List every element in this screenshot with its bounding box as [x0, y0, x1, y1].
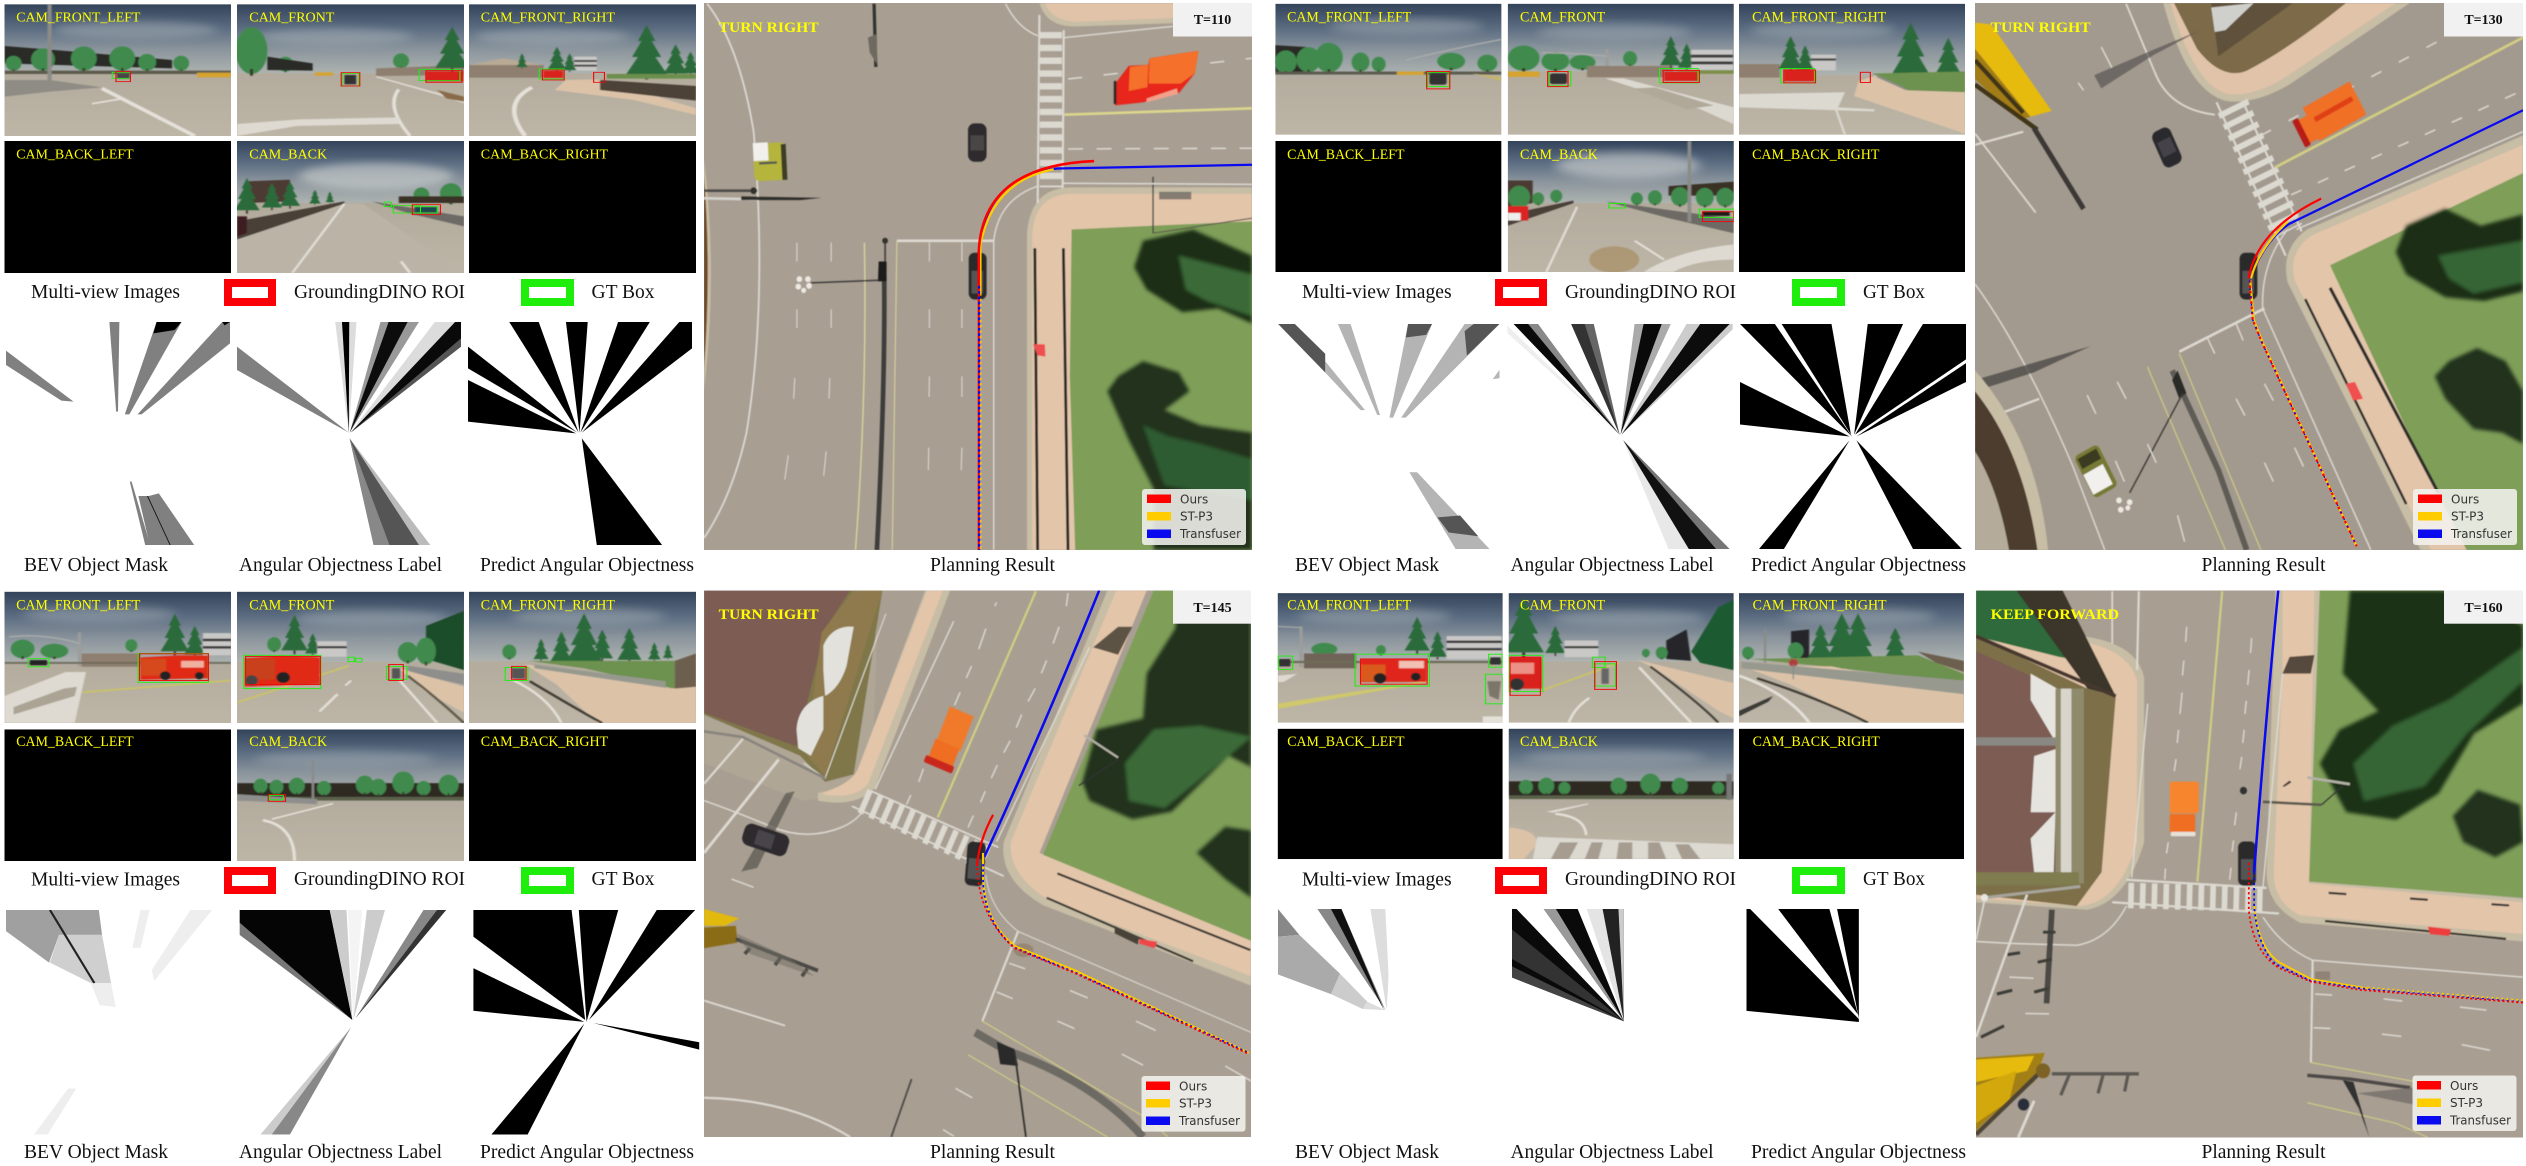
legend swatch: GT Box	[525, 283, 570, 302]
GT box	[419, 69, 460, 81]
ROI box	[426, 71, 462, 82]
caption: Predict Angular Objectness: Predict Angular Objectness	[1751, 1141, 1966, 1163]
legend swatch: GT Box	[1796, 283, 1841, 302]
mask: BEV object mask	[1278, 324, 1500, 549]
GT box	[1592, 657, 1605, 668]
legend swatch: GroundingDINO ROI	[228, 283, 272, 302]
camera: CAM_BACK_RIGHT	[1739, 141, 1965, 272]
time stamp: T=160	[2464, 601, 2503, 616]
ROI box	[1548, 72, 1568, 87]
caption: Angular Objectness Label: Angular Objectness Label	[1510, 1141, 1714, 1163]
caption: GT Box: GT Box	[592, 281, 654, 303]
GT box	[1278, 656, 1293, 669]
GT box	[348, 657, 354, 662]
camera label: CAM_BACK_LEFT	[1287, 733, 1404, 750]
driving command: TURN RIGHT	[1991, 20, 2091, 36]
caption: Planning Result: Planning Result	[930, 554, 1055, 576]
legend swatch: GroundingDINO ROI	[1499, 871, 1543, 890]
legend swatch: GT Box	[1796, 871, 1841, 890]
caption: Multi-view Images: Multi-view Images	[1302, 281, 1452, 303]
camera label: CAM_BACK_RIGHT	[1752, 146, 1879, 163]
caption: Predict Angular Objectness: Predict Angular Objectness	[480, 1141, 694, 1163]
GT box	[356, 658, 362, 662]
caption: GT Box: GT Box	[1863, 281, 1925, 303]
ROI box	[1703, 212, 1734, 222]
camera label: CAM_BACK	[249, 733, 327, 750]
GT box	[270, 795, 283, 800]
map scene T=145	[704, 590, 1251, 1137]
panel: planning result T=130	[1975, 0, 2523, 576]
GT box	[539, 69, 564, 79]
ROI box	[1595, 662, 1616, 689]
trajectory legend: Transfuser	[2450, 527, 2512, 541]
trajectory legend: Ours	[2451, 492, 2479, 506]
ROI box	[116, 72, 130, 82]
caption: Angular Objectness Label: Angular Objectness Label	[239, 554, 442, 576]
ROI box	[139, 654, 208, 680]
GT box	[505, 668, 528, 680]
caption: Planning Result: Planning Result	[2202, 554, 2326, 576]
GT box	[112, 72, 130, 78]
camera label: CAM_BACK	[1520, 733, 1598, 750]
GT box	[1609, 203, 1625, 208]
mask: BEV object mask	[6, 910, 212, 1134]
camera label: CAM_FRONT	[1520, 9, 1605, 25]
camera: CAM_FRONT_LEFT	[1275, 4, 1502, 135]
camera: CAM_BACK_RIGHT	[1739, 728, 1964, 860]
GT box	[1660, 69, 1698, 83]
panel: planning result T=145	[704, 590, 1251, 1163]
camera label: CAM_FRONT	[249, 596, 334, 613]
time stamp: T=130	[2464, 13, 2503, 28]
caption: Multi-view Images: Multi-view Images	[1302, 869, 1452, 891]
camera: CAM_BACK_LEFT	[4, 729, 231, 861]
caption: GroundingDINO ROI: GroundingDINO ROI	[294, 868, 465, 890]
camera: CAM_BACK	[1508, 141, 1734, 272]
trajectory legend	[2413, 489, 2517, 545]
driving command: TURN RIGHT	[719, 20, 819, 36]
camera: CAM_BACK_RIGHT	[469, 141, 696, 273]
camera label: CAM_BACK_LEFT	[16, 146, 134, 162]
camera: CAM_FRONT_LEFT	[1278, 593, 1503, 723]
ROI box	[1361, 659, 1427, 684]
camera label: CAM_FRONT_RIGHT	[1752, 9, 1886, 25]
caption: GT Box: GT Box	[1863, 868, 1925, 890]
GT box	[1549, 72, 1571, 86]
driving command: TURN RIGHT	[719, 607, 819, 623]
time stamp	[2444, 590, 2523, 624]
GT box	[342, 73, 359, 86]
ROI box	[512, 666, 526, 679]
caption: BEV Object Mask: BEV Object Mask	[1295, 554, 1439, 576]
camera label: CAM_BACK_RIGHT	[481, 146, 608, 162]
camera label: CAM_FRONT_RIGHT	[1753, 596, 1887, 613]
camera: CAM_BACK	[1508, 728, 1734, 860]
caption: BEV Object Mask: BEV Object Mask	[24, 1141, 168, 1163]
GT box	[244, 655, 321, 689]
camera: CAM_FRONT	[1508, 593, 1734, 723]
map scene T=110	[704, 3, 1252, 550]
ROI box	[1510, 657, 1540, 695]
camera label: CAM_BACK_LEFT	[1287, 146, 1405, 163]
camera label: CAM_BACK	[249, 146, 327, 162]
camera label: CAM_FRONT_RIGHT	[481, 9, 615, 25]
camera label: CAM_BACK_RIGHT	[1753, 733, 1880, 750]
GT box	[1489, 654, 1502, 667]
camera label: CAM_BACK_RIGHT	[481, 733, 608, 750]
panel: planning result T=160	[1976, 590, 2523, 1163]
caption: GroundingDINO ROI: GroundingDINO ROI	[1565, 281, 1736, 303]
trajectory lines	[2248, 110, 2523, 546]
ROI box	[1427, 72, 1450, 89]
caption: Angular Objectness Label: Angular Objectness Label	[239, 1141, 442, 1163]
camera: CAM_BACK_LEFT	[4, 141, 231, 273]
mask: BEV object mask	[1278, 909, 1388, 1010]
trajectory lines	[979, 161, 1252, 550]
GT box	[1781, 69, 1815, 83]
panel: T=110 sensor views and masks	[4, 4, 699, 576]
mask: angular objectness label	[1512, 909, 1624, 1022]
camera: CAM_BACK_RIGHT	[469, 729, 696, 861]
ROI box	[542, 70, 564, 80]
mask: angular objectness label	[1508, 324, 1733, 549]
panel: T=145 sensor views and masks	[4, 592, 699, 1163]
caption: GroundingDINO ROI: GroundingDINO ROI	[1565, 868, 1736, 890]
mask: predicted angular objectness	[1740, 324, 1966, 549]
camera: CAM_FRONT_RIGHT	[1739, 593, 1964, 723]
camera: CAM_FRONT	[237, 4, 464, 136]
trajectory lines	[2249, 590, 2523, 1003]
time stamp	[1173, 3, 1252, 36]
time stamp: T=110	[1194, 13, 1231, 28]
panel: T=130 sensor views and masks	[1274, 4, 1966, 576]
trajectory legend	[1142, 489, 1246, 545]
ROI box	[246, 656, 320, 685]
GT box	[1509, 655, 1543, 692]
trajectory legend: Ours	[1179, 1080, 1207, 1094]
legend swatch: GT Box	[525, 871, 570, 890]
caption: Predict Angular Objectness: Predict Angular Objectness	[1751, 554, 1966, 576]
GT box	[393, 206, 421, 213]
time stamp	[2444, 3, 2523, 36]
mask: predicted angular objectness	[473, 910, 700, 1134]
ROI box	[1860, 72, 1870, 82]
GT box	[138, 653, 208, 682]
caption: Multi-view Images: Multi-view Images	[31, 281, 180, 303]
camera: CAM_FRONT_LEFT	[4, 4, 231, 136]
ROI box	[412, 205, 440, 215]
GT box	[387, 666, 407, 679]
ROI box	[1663, 70, 1699, 82]
camera: CAM_BACK_LEFT	[1278, 728, 1503, 860]
trajectory legend: Ours	[1180, 492, 1208, 506]
trajectory lines	[977, 590, 1249, 1054]
camera label: CAM_FRONT_RIGHT	[481, 596, 615, 613]
camera: CAM_BACK	[237, 729, 464, 861]
camera: CAM_FRONT	[237, 592, 464, 723]
trajectory legend: ST-P3	[2450, 1096, 2483, 1110]
mask: predicted angular objectness	[1746, 909, 1859, 1022]
camera: CAM_BACK	[237, 141, 464, 273]
GT box	[28, 659, 49, 667]
ROI box	[389, 665, 403, 680]
panel: T=160 sensor views and masks	[1278, 593, 1973, 1163]
camera label: CAM_BACK_LEFT	[16, 733, 134, 750]
camera: CAM_FRONT_RIGHT	[469, 592, 696, 723]
camera: CAM_FRONT_RIGHT	[469, 4, 696, 136]
time stamp	[1173, 590, 1251, 624]
camera label: CAM_FRONT_LEFT	[16, 9, 140, 25]
trajectory legend: Transfuser	[1178, 1114, 1240, 1128]
GT box	[412, 206, 437, 213]
caption: BEV Object Mask: BEV Object Mask	[1295, 1141, 1439, 1163]
trajectory legend	[2412, 1076, 2516, 1131]
caption: Predict Angular Objectness: Predict Angular Objectness	[480, 554, 694, 576]
caption: GroundingDINO ROI: GroundingDINO ROI	[294, 281, 465, 303]
GT box	[1595, 664, 1616, 686]
GT box	[1428, 72, 1449, 87]
camera label: CAM_FRONT_LEFT	[1287, 9, 1411, 25]
caption: Angular Objectness Label: Angular Objectness Label	[1510, 554, 1714, 576]
ROI box	[1784, 70, 1816, 83]
camera label: CAM_FRONT_LEFT	[16, 596, 140, 613]
trajectory legend: Ours	[2450, 1079, 2478, 1093]
legend swatch: GroundingDINO ROI	[1499, 283, 1543, 302]
camera: CAM_FRONT_LEFT	[4, 592, 231, 723]
mask: angular objectness label	[240, 910, 446, 1134]
camera label: CAM_BACK	[1520, 146, 1598, 163]
caption: Multi-view Images: Multi-view Images	[31, 869, 180, 891]
camera: CAM_FRONT_RIGHT	[1739, 4, 1965, 135]
trajectory legend: ST-P3	[2451, 510, 2484, 524]
caption: BEV Object Mask: BEV Object Mask	[24, 554, 168, 576]
GT box	[1355, 654, 1429, 686]
ROI box	[268, 795, 285, 801]
caption: Planning Result: Planning Result	[930, 1141, 1055, 1163]
caption: GT Box: GT Box	[592, 868, 654, 890]
mask: BEV object mask	[6, 322, 230, 545]
legend swatch: GroundingDINO ROI	[228, 871, 272, 890]
trajectory legend: Transfuser	[1179, 527, 1241, 541]
trajectory legend: Transfuser	[2449, 1114, 2511, 1128]
ROI box	[341, 73, 360, 86]
trajectory legend: ST-P3	[1180, 510, 1213, 524]
panel: planning result T=110	[704, 3, 1252, 576]
caption: Planning Result: Planning Result	[2202, 1141, 2326, 1163]
map scene T=160	[1976, 590, 2523, 1138]
driving command: KEEP FORWARD	[1991, 607, 2119, 623]
trajectory legend	[1142, 1076, 1246, 1132]
GT box	[1699, 209, 1734, 217]
mask: predicted angular objectness	[468, 322, 692, 545]
camera: CAM_BACK_LEFT	[1275, 141, 1502, 272]
mask: angular objectness label	[237, 322, 461, 545]
camera label: CAM_FRONT	[1520, 596, 1605, 613]
camera: CAM_FRONT	[1508, 4, 1734, 135]
time stamp: T=145	[1193, 601, 1232, 616]
GT box	[384, 202, 392, 207]
camera label: CAM_FRONT_LEFT	[1287, 596, 1411, 613]
camera label: CAM_FRONT	[249, 9, 334, 25]
GT box	[1485, 674, 1503, 704]
map scene T=130	[1975, 3, 2523, 550]
ROI box	[594, 72, 604, 82]
trajectory legend: ST-P3	[1179, 1096, 1212, 1110]
